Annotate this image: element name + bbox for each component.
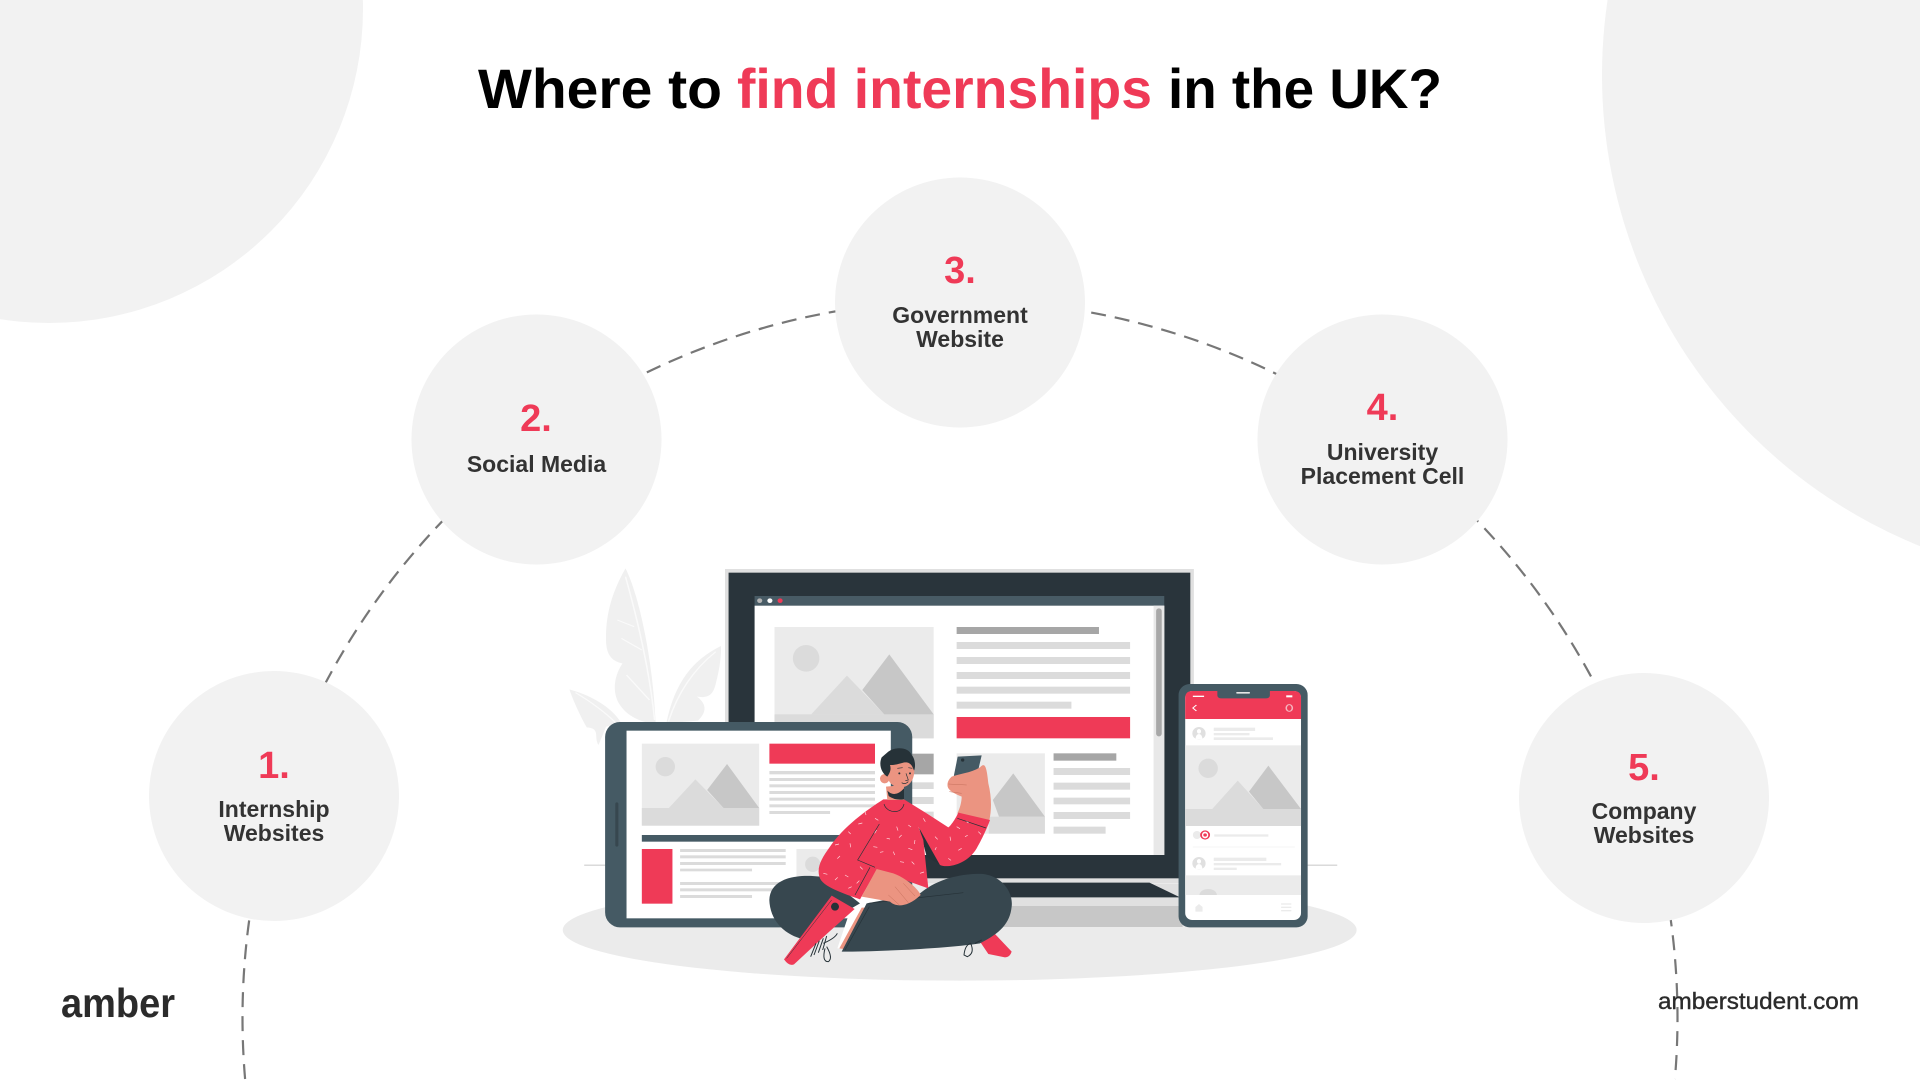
head (880, 748, 915, 800)
step 4: university placement cell: University (1327, 439, 1438, 465)
step 2: social media (412, 314, 662, 564)
right leg (842, 874, 1012, 952)
decorative circle: top right (1602, 0, 1920, 583)
background leaves (569, 568, 721, 745)
raised hand and phone (947, 755, 991, 820)
website url: amberstudent.com (1658, 988, 1859, 1014)
person sitting with phone (769, 748, 1012, 965)
phone (1179, 684, 1308, 927)
sweater flecks (823, 812, 981, 888)
step 5: company websites (1519, 673, 1769, 923)
title: find internships (737, 57, 1152, 120)
step 5: company websites: Company (1592, 798, 1697, 824)
step 3: government website: Government (892, 302, 1028, 328)
illustration: person with devices (563, 568, 1357, 981)
tablet (605, 722, 912, 927)
sweater (819, 799, 990, 899)
step 1: internship websites: Websites (224, 820, 324, 846)
step 1: internship websites: 1. (258, 745, 290, 787)
title: in the UK? (1168, 57, 1442, 120)
step 2: social media: 2. (520, 398, 552, 440)
laptop (725, 569, 1194, 927)
shoelaces (811, 933, 837, 962)
step 3: government website (835, 178, 1085, 428)
step 1: internship websites (149, 671, 399, 921)
step 1: internship websites: Internship (218, 796, 330, 822)
left shoe (784, 896, 855, 965)
left leg (769, 876, 860, 938)
ground ellipse (563, 879, 1357, 981)
step 3: government website: Website (916, 326, 1004, 352)
dashed arc connecting steps (242, 300, 1677, 1079)
logo: amber: amber (61, 980, 175, 1026)
sock and trouser cuff (837, 907, 865, 948)
step 4: university placement cell: Placement Cell (1301, 463, 1464, 489)
step 2: social media: Social Media (467, 451, 606, 477)
horizon lines (584, 865, 1337, 866)
right shoe (980, 934, 1012, 957)
title (478, 57, 1442, 120)
title: Where to (478, 57, 722, 120)
step 4: university placement cell: 4. (1367, 387, 1398, 429)
step 4: university placement cell (1258, 314, 1508, 564)
step 5: company websites: 5. (1628, 747, 1660, 789)
decorative circle: top left (0, 0, 363, 323)
step 5: company websites: Websites (1594, 822, 1694, 848)
step 3: government website: 3. (944, 250, 976, 292)
gap between arm and torso (918, 825, 943, 867)
resting hand (862, 869, 921, 905)
